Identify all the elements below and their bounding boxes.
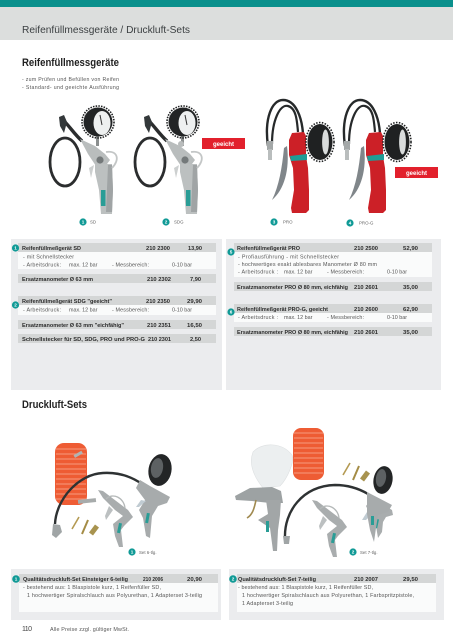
panel: set 6-piece: 1 xyxy=(15,577,18,582)
footer note: Alle Preise zzgl. gültiger MwSt. xyxy=(50,627,129,633)
caption: PRO: 3 xyxy=(273,220,276,225)
row: Ersatzmanometer PRO: 210 2601 xyxy=(354,285,379,291)
product photo: PRO red gun xyxy=(267,100,334,213)
product photo: SDG gauge gun xyxy=(135,106,202,214)
header band xyxy=(0,7,453,40)
row: PRO: 0-10 bar xyxy=(387,270,407,276)
row: SD: - mit Schnellstecker xyxy=(23,254,74,260)
product photo: set 7-piece xyxy=(235,428,395,557)
caption: Set 7-tlg.: 2 xyxy=(352,550,355,555)
row: SD: max. 12 bar xyxy=(69,262,98,268)
heading: Druckluft-Sets: Druckluft-Sets xyxy=(22,399,87,411)
row: SDG: 0-10 bar xyxy=(172,308,192,314)
row: PRO-G: 6 xyxy=(230,310,233,315)
row: PRO-G: - Arbeitsdruck : xyxy=(238,315,278,321)
panel: set 7-piece: 29,50 xyxy=(403,577,418,583)
caption: Set 6-tlg.: 1 xyxy=(131,550,134,555)
row: SDG: - Arbeitsdruck: xyxy=(23,308,61,314)
panel: set 6-piece: 210 2006 xyxy=(143,577,164,583)
row: PRO: - Arbeitsdruck : xyxy=(238,270,278,276)
caption: PRO-G xyxy=(346,219,374,227)
row: SD: 210 2300 xyxy=(146,246,170,252)
row: PRO-G: 210 2600 xyxy=(354,307,378,313)
row: Ersatzmanometer PRO-G: 210 2601 xyxy=(354,330,379,336)
panel: right product table xyxy=(226,239,441,390)
caption: Set 6-tlg. xyxy=(128,548,157,556)
row: SD: 0-10 bar xyxy=(172,262,192,268)
header band: Reifenfüllmessgeräte / Druckluft-Sets xyxy=(22,24,190,36)
caption: PRO xyxy=(270,218,293,226)
row: Ersatzmanometer eichfähig: Ersatzmanometer Ø 63 mm "eichfähig" xyxy=(22,323,124,329)
product photo: PRO-G red gun xyxy=(344,100,411,213)
row: PRO: 5 xyxy=(230,250,233,255)
row: PRO: 210 2500 xyxy=(354,246,378,252)
row: Ersatzmanometer eichfähig: 16,50 xyxy=(187,323,202,329)
row: Ersatzmanometer 63 mm xyxy=(18,274,216,283)
caption: SD: 1 xyxy=(82,220,85,225)
panel: set 6-piece: 20,90 xyxy=(187,577,202,583)
panel: set 6-piece: 1 hochwertiger Spiralschlauch aus Polyurethan, 1 Adapterset 3-teilig xyxy=(27,593,202,599)
row: SD: 1 xyxy=(14,246,17,251)
row: Ersatzmanometer eichfähig xyxy=(18,320,216,329)
row: Ersatzmanometer PRO-G xyxy=(234,327,432,336)
row: SDG: Reifenfüllmeßgerät SDG "geeicht" xyxy=(22,299,112,305)
row: PRO-G: Reifenfüllmeßgerät PRO-G, geeicht xyxy=(237,307,328,313)
row: Ersatzmanometer PRO-G: Ersatzmanometer PRO Ø 80 mm, eichfähig xyxy=(237,330,348,336)
panel: left product table xyxy=(11,239,222,390)
row: Ersatzmanometer eichfähig: 210 2351 xyxy=(147,323,172,329)
badge: geeicht SDG: geeicht xyxy=(213,142,234,148)
row: PRO-G: 62,90 xyxy=(403,307,418,313)
row: Ersatzmanometer 63 mm: 210 2302 xyxy=(147,277,171,283)
row: SD: - Messbereich: xyxy=(112,262,149,268)
caption: SD: SD xyxy=(90,220,96,224)
badge: geeicht PRO-G: geeicht xyxy=(406,171,427,177)
row: SD: - Arbeitsdruck: xyxy=(23,262,61,268)
row: Schnellstecker xyxy=(18,334,216,343)
row: SD: Reifenfüllmeßgerät SD xyxy=(22,246,81,252)
row: SDG: max. 12 bar xyxy=(69,308,98,314)
row: Ersatzmanometer PRO: Ersatzmanometer PRO Ø 80 mm, eichfähig xyxy=(237,285,348,291)
caption: PRO-G: PRO-G xyxy=(359,220,374,226)
row: PRO: 52,90 xyxy=(403,246,418,252)
row: SDG xyxy=(12,296,216,315)
panel: set 7-piece: 1 hochwertiger Spiralschlauch aus Polyurethan, 1 Farbspritzpistole, xyxy=(242,593,414,599)
page number: 110 xyxy=(22,626,32,633)
panel: set 6-piece: Qualitätsdruckluft-Set Einsteiger 6-teilig xyxy=(23,577,128,583)
row: Ersatzmanometer 63 mm: 7,90 xyxy=(190,277,201,283)
row: PRO xyxy=(227,243,432,277)
caption: SDG xyxy=(162,218,184,226)
panel: set 7-piece xyxy=(229,569,444,620)
caption: PRO: PRO xyxy=(283,220,293,224)
product photo: SD gauge gun xyxy=(50,106,117,214)
row: Schnellstecker: Schnellstecker für SD, SDG, PRO und PRO-G xyxy=(22,337,145,343)
row: PRO-G: 0-10 bar xyxy=(387,315,407,321)
caption: Set 6-tlg.: Set 6-tlg. xyxy=(139,550,157,555)
intro bullets: - zum Prüfen und Befüllen von Reifen xyxy=(22,77,119,83)
row: PRO-G: - Messbereich: xyxy=(327,315,364,321)
row: SDG: 2 xyxy=(14,303,17,308)
caption: SD xyxy=(79,218,96,226)
row: PRO-G xyxy=(227,304,432,322)
row: SD: 13,90 xyxy=(188,246,202,252)
caption: PRO-G: 4 xyxy=(349,221,352,226)
intro bullets: - Standard- und geeichte Ausführung xyxy=(22,85,119,91)
panel: set 7-piece: Qualitätsdruckluft-Set 7-teilig xyxy=(238,577,316,583)
row: PRO: - hochwertiges exakt ablesbares Manometer Ø 80 mm xyxy=(238,262,378,268)
top teal bar xyxy=(0,0,453,7)
panel: set 7-piece: - bestehend aus: 1 Blaspistole kurz, 1 Reifenfüller SD, xyxy=(238,585,374,591)
row: SDG: 210 2350 xyxy=(146,299,170,305)
panel: set 6-piece xyxy=(11,569,221,620)
row: Ersatzmanometer PRO xyxy=(234,282,432,291)
row: SDG: - Messbereich: xyxy=(112,308,149,314)
row: PRO: max. 12 bar xyxy=(284,270,313,276)
intro bullets xyxy=(22,77,119,91)
panel: set 7-piece: 1 Adapterset 3-teilig xyxy=(242,601,293,607)
badge: geeicht PRO-G xyxy=(395,167,438,178)
row: SDG: 29,90 xyxy=(187,299,202,305)
row: Schnellstecker: 210 2301 xyxy=(148,337,172,343)
heading: Reifenfüllmessgeräte: Reifenfüllmessgeräte xyxy=(22,57,119,69)
caption: SDG: SDG xyxy=(174,220,184,224)
panel: set 7-piece: 210 2007 xyxy=(354,577,378,583)
row: Ersatzmanometer PRO-G: 35,00 xyxy=(403,330,418,336)
product photo: set 6-piece xyxy=(52,443,174,547)
row: Ersatzmanometer PRO: 35,00 xyxy=(403,285,418,291)
row: SD xyxy=(12,243,216,269)
row: PRO-G: max. 12 bar xyxy=(284,315,313,321)
row: Schnellstecker: 2,50 xyxy=(190,337,201,343)
caption: Set 7-tlg.: Set 7-tlg. xyxy=(360,550,378,555)
row: PRO: - Messbereich: xyxy=(327,270,364,276)
badge: geeicht SDG xyxy=(202,138,245,149)
row: Ersatzmanometer 63 mm: Ersatzmanometer Ø 63 mm xyxy=(22,277,93,283)
row: PRO: - Profiausführung - mit Schnellstecker xyxy=(238,254,339,260)
caption: SDG: 2 xyxy=(165,220,168,225)
caption: Set 7-tlg. xyxy=(349,548,378,556)
panel: set 7-piece: 2 xyxy=(232,577,235,582)
panel: set 6-piece: - bestehend aus: 1 Blaspistole kurz, 1 Reifenfüller SD, xyxy=(23,585,162,591)
row: PRO: Reifenfüllmeßgerät PRO xyxy=(237,246,300,252)
